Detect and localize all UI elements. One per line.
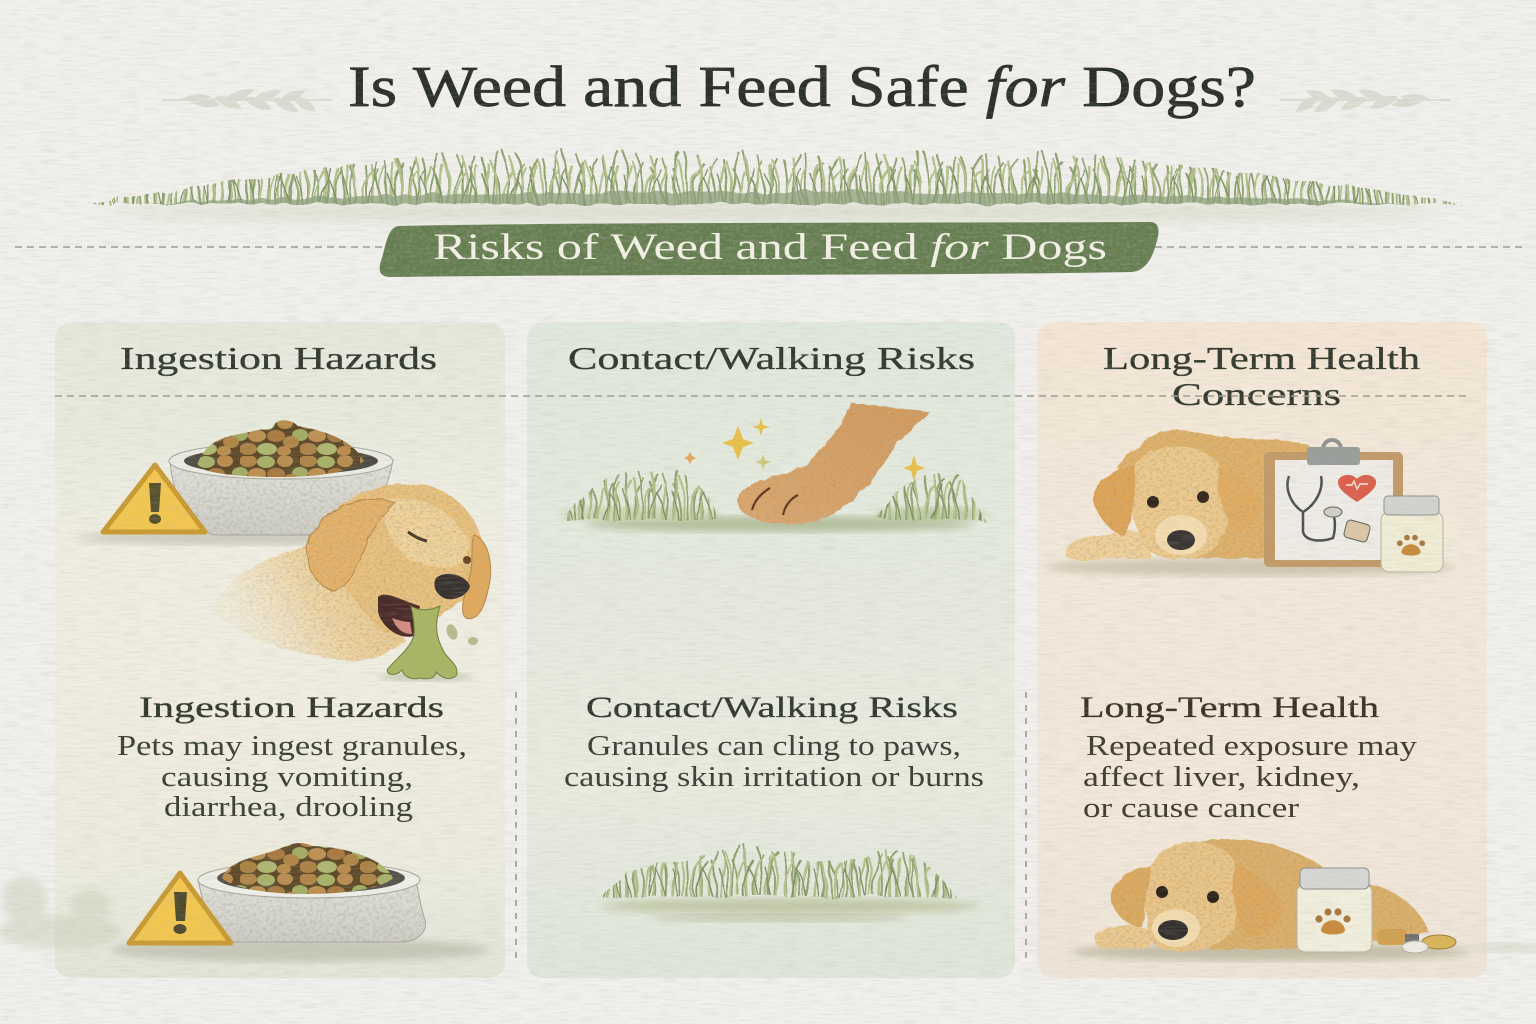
grass strip [80, 145, 1480, 221]
medicine jar [1297, 868, 1372, 952]
body text: ingestion hazards: Pets may ingest granules, [117, 731, 467, 762]
heading: ingestion hazards: Ingestion Hazards [120, 340, 437, 376]
panel: long-term health concerns [1037, 322, 1487, 978]
body text: ingestion hazards: diarrhea, drooling [164, 792, 413, 823]
body text: contact walking risks [564, 731, 984, 793]
icon: warning triangle [129, 873, 231, 943]
vomit [387, 606, 457, 679]
icon: warning triangle [103, 465, 205, 532]
body text: ingestion hazards [117, 731, 467, 823]
body text: long-term health: Repeated exposure may [1086, 731, 1417, 762]
illustration: paw on treated grass [555, 403, 990, 532]
title: Is Weed and Feed Safe for Dogs? [348, 54, 1256, 119]
subheading: long-term health: Long-Term Health [1080, 691, 1379, 724]
sparkles [684, 418, 925, 481]
illustration: lower food bowl with warning sign [110, 843, 490, 962]
divider dashes under grass [15, 246, 1522, 248]
heading: contact walking risks: Contact/Walking Risks [568, 340, 975, 376]
illustration: food bowl with warning sign [75, 420, 425, 545]
icon: heart [1338, 475, 1376, 502]
body text: long-term health [1083, 731, 1417, 824]
heading: long-term health concerns: Concerns [1172, 376, 1341, 412]
dog right ear [1218, 466, 1262, 530]
panel: ingestion hazards [55, 322, 505, 978]
medicine jar [1381, 496, 1443, 572]
heading: long-term health concerns [1103, 340, 1420, 412]
wash bottom-right [1474, 943, 1536, 953]
long divider across panels [55, 395, 1470, 397]
dog front paw [1095, 926, 1155, 948]
decorative sprig left [162, 85, 332, 117]
dog mouth [378, 595, 420, 637]
illustration: tired dog with jar and pills [1070, 839, 1470, 961]
dog body [1117, 430, 1310, 558]
pills [1377, 929, 1456, 953]
subheading: contact walking risks: Contact/Walking Risks [586, 691, 958, 724]
dog head [1144, 842, 1241, 951]
banner [380, 222, 1158, 277]
body text: ingestion hazards: causing vomiting, [161, 762, 413, 793]
corner foliage bottom-left [0, 876, 122, 948]
dog left ear [1093, 465, 1136, 535]
grass tufts [562, 470, 987, 523]
panel: contact and walking risks [527, 322, 1015, 978]
icon: stethoscope [1287, 476, 1335, 540]
illustration: sick dog vomiting [210, 484, 491, 681]
icon: bandage [1343, 519, 1371, 543]
dog front paw [1065, 531, 1155, 560]
banner heading: Risks of Weed and Feed for Dogs [433, 227, 1107, 268]
dog right ear [1232, 862, 1283, 937]
dog ear [307, 499, 395, 590]
heading: long-term health concerns: Long-Term Health [1103, 340, 1420, 376]
dog eyes [408, 532, 427, 541]
dog head [1130, 446, 1228, 559]
body text: contact walking risks: Granules can cling to paws, [587, 731, 961, 762]
vertical dividers between panels [516, 692, 1026, 965]
decorative sprig right [1280, 85, 1450, 117]
body text: long-term health: affect liver, kidney, [1083, 762, 1360, 793]
dog nose [434, 574, 470, 599]
body text: contact walking risks: causing skin irritation or burns [564, 762, 984, 793]
illustration: resting dog with clipboard and jar [1045, 430, 1455, 576]
dog body [1200, 839, 1428, 950]
dog left ear [1111, 866, 1152, 927]
body text: long-term health: or cause cancer [1083, 793, 1300, 824]
illustration: lower grass patch [595, 837, 980, 922]
subheading: ingestion hazards: Ingestion Hazards [139, 691, 444, 724]
clipboard [1264, 440, 1403, 567]
dog leg and paw [738, 403, 930, 524]
